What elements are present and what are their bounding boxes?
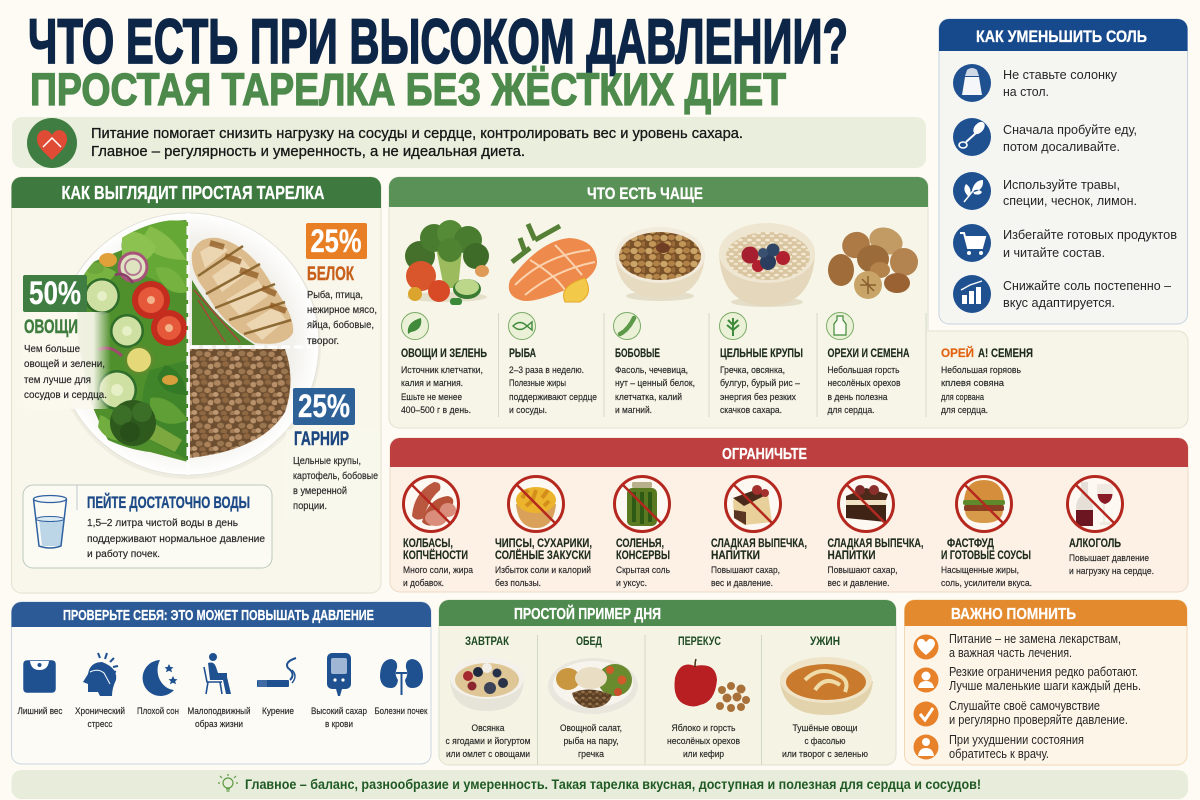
- callout: vegetables 50%: 50%: [29, 275, 81, 311]
- panel: example day: [439, 600, 896, 765]
- meal: snack: [667, 634, 750, 760]
- limit item: burger: И ГОТОВЫЕ СОУСЫ: [941, 550, 1031, 562]
- food column: legumes: БОБОВЫЕ: [615, 348, 660, 360]
- plate illustration: [55, 213, 321, 479]
- tip: chart: [953, 275, 1172, 313]
- limit item: pickles: и уксус.: [616, 578, 647, 589]
- meal: breakfast: ЗАВТРАК: [465, 634, 510, 648]
- limit item: pastry: вес и давление.: [711, 578, 773, 589]
- limit item: pastry: [711, 476, 807, 589]
- limit item: alcohol: Повышает давление: [1069, 553, 1149, 564]
- panel: limit: [390, 438, 1188, 592]
- food column: whole grains: [720, 312, 803, 416]
- meal: dinner: УЖИН: [810, 634, 840, 648]
- food column: garbled nuts duplicate: Небольшая горяовь: [941, 365, 1021, 376]
- callout: vegetables 50%: ОВОЩИ: [24, 317, 78, 338]
- limit item: alcohol: АЛКОГОЛЬ: [1069, 538, 1121, 550]
- tip: shopping cart: [953, 224, 1177, 262]
- panel: eat more often: ЧТО ЕСТЬ ЧАЩЕ: [587, 184, 703, 203]
- food column: nuts and seeds: для сердца.: [828, 405, 874, 416]
- footer banner: Главное – баланс, разнообразие и умеренность. Такая тарелка вкусная, доступная и полезная для сердца и сосудов!: [245, 776, 981, 792]
- limit item: sausages: КОЛБАСЫ,: [403, 538, 453, 550]
- icon: pod: [614, 312, 640, 340]
- limit item: chips: без пользы.: [495, 578, 541, 589]
- food: vegetables: [405, 220, 489, 305]
- meal: dinner: или творог с зеленью: [782, 749, 868, 760]
- food column: fish: 2–3 раза в неделю.: [509, 365, 584, 376]
- limit item: pastry: СЛАДКАЯ ВЫПЕЧКА,: [711, 538, 807, 550]
- limit item: burger: [941, 476, 1032, 589]
- food column: garbled nuts duplicate: А! СЕМЕНЯ: [978, 348, 1033, 360]
- icon: fish: [508, 312, 536, 340]
- limit item: burger: Насыщенные жиры,: [941, 565, 1019, 576]
- limit item: burger: соль, усилители вкуса.: [941, 578, 1032, 589]
- note: doctor: При ухудшении состояния: [949, 733, 1084, 747]
- limit item: chips: [495, 476, 592, 589]
- meal: snack: несолёных орехов: [667, 736, 740, 747]
- limit item: chips: Избыток соли и калорий: [495, 565, 591, 576]
- food: oatmeal bowl: [719, 223, 815, 307]
- note: self-check: [914, 699, 1128, 727]
- callout: vegetables 50%: тем лучше для: [24, 375, 91, 386]
- note: small steps: Резкие ограничения редко работают.: [949, 665, 1138, 679]
- callout: water: поддерживают нормальное давление: [87, 534, 265, 545]
- meal: dinner: [780, 634, 873, 760]
- icon: wheat: [720, 312, 746, 340]
- callout: side dish 25%: Цельные крупы,: [293, 456, 361, 467]
- risk: smoking: [257, 658, 296, 717]
- food column: legumes: нут – ценный белок,: [615, 378, 695, 389]
- tip: salt shaker: Не ставьте солонку: [1003, 67, 1117, 82]
- food column: legumes: Фасоль, чечевица,: [615, 365, 688, 376]
- tip: spoon: Сначала пробуйте еду,: [1003, 122, 1137, 137]
- chicken: [192, 238, 293, 344]
- risk: kidney disease: [374, 659, 428, 717]
- meal: lunch: Овощной салат,: [560, 723, 622, 734]
- callout: protein 25%: творог.: [307, 336, 339, 347]
- meal: lunch: рыба на пару,: [564, 736, 618, 747]
- limit item: sausages: [403, 476, 474, 589]
- meal: snack: Яблоко и горсть: [672, 723, 736, 734]
- meal: breakfast: [446, 634, 530, 760]
- meal: breakfast: с ягодами и йогуртом: [446, 736, 530, 747]
- tip: chart: Снижайте соль постепенно –: [1003, 278, 1172, 293]
- food column: fish: Полезные жиры: [509, 378, 566, 389]
- callout: protein 25%: [306, 223, 377, 347]
- meal: dinner: Тушёные овощи: [792, 723, 858, 734]
- risk: poor sleep: Плохой сон: [137, 706, 179, 717]
- panel: eat more often: [389, 177, 1188, 428]
- callout: water: 1,5–2 литра чистой воды в день: [87, 518, 238, 529]
- food column: whole grains: булгур, бурый рис –: [720, 378, 801, 389]
- food: walnuts: [828, 223, 918, 299]
- callout: protein 25%: яйца, бобовые,: [307, 319, 374, 331]
- risk: sedentary lifestyle: [188, 653, 250, 730]
- food column: vegetables: Ешьте не менее: [401, 392, 462, 403]
- tip: herbs: [953, 172, 1137, 210]
- meal: breakfast: Овсянка: [472, 723, 505, 734]
- food column: fish: [508, 312, 597, 416]
- meal: breakfast: или омлет с овощами: [446, 749, 530, 760]
- risk: chronic stress: [75, 653, 125, 730]
- panel: example day: ПРОСТОЙ ПРИМЕР ДНЯ: [514, 605, 661, 623]
- risk: chronic stress: Хронический: [75, 706, 125, 717]
- intro banner: Питание помогает снизить нагрузку на сосуды и сердце, контролировать вес и уровень сахара.: [91, 125, 743, 142]
- panel: limit: ОГРАНИЧЬТЕ: [722, 446, 807, 463]
- risk: high blood sugar: Высокий сахар: [311, 706, 367, 717]
- meal: lunch: [548, 634, 638, 760]
- tip: herbs: Используйте травы,: [1003, 177, 1120, 192]
- meal: dinner: с фасолью: [804, 736, 846, 747]
- panel: remember: ВАЖНО ПОМНИТЬ: [951, 606, 1076, 623]
- limit item: alcohol: [1068, 476, 1154, 577]
- food column: legumes: [614, 312, 695, 416]
- meal: lunch: гречка: [578, 749, 605, 760]
- panel: check yourself: [12, 602, 431, 764]
- broccoli on plate: [150, 424, 182, 452]
- limit item: pastry: Повышают сахар,: [711, 565, 780, 576]
- food column: legumes: и магний.: [615, 405, 652, 416]
- callout: protein 25%: Рыба, птица,: [307, 289, 363, 301]
- intro banner: Главное – регулярность и умеренность, а не идеальная диета.: [91, 143, 525, 160]
- food column: nuts and seeds: в день полезна: [828, 392, 888, 403]
- food column: vegetables: 400–500 г в день.: [401, 405, 471, 416]
- icon: light bulb: [218, 774, 238, 791]
- limit item: chips: ЧИПСЫ, СУХАРИКИ,: [495, 538, 592, 550]
- tip: shopping cart: Избегайте готовых продуктов: [1003, 227, 1177, 242]
- food column: fish: и сосуды.: [509, 405, 547, 416]
- footer banner: [12, 770, 1188, 799]
- note: doctor: обратитесь к врачу.: [949, 747, 1049, 761]
- food column: nuts and seeds: Небольшая горсть: [828, 365, 900, 376]
- food column: whole grains: скачков сахара.: [720, 405, 782, 416]
- note: small steps: Лучше маленькие шаги каждый день.: [949, 679, 1141, 693]
- callout: side dish 25%: картофель, бобовые: [293, 470, 378, 482]
- note: medication: а важная часть лечения.: [949, 646, 1072, 660]
- lentils: [190, 349, 290, 458]
- food column: vegetables: Источник клетчатки,: [401, 365, 483, 376]
- food column: whole grains: энергия без резких: [720, 392, 796, 403]
- meal: snack: или кефир: [683, 749, 724, 760]
- tip: spoon: [953, 118, 1137, 156]
- limit item: pickles: СОЛЕНЬЯ,: [616, 538, 664, 550]
- meal: snack: ПЕРЕКУС: [678, 634, 721, 648]
- note: medication: Питание – не замена лекарствам,: [949, 632, 1121, 646]
- food column: whole grains: Гречка, овсянка,: [720, 365, 785, 376]
- tip: spoon: потом досаливайте.: [1003, 139, 1120, 154]
- icon: bottle: [826, 312, 854, 340]
- callout: water: [23, 485, 272, 568]
- risk: chronic stress: стресс: [88, 719, 113, 730]
- food column: nuts and seeds: несолёных орехов: [828, 378, 900, 389]
- icon: heart: [27, 118, 77, 168]
- note: self-check: Слушайте своё самочувствие: [949, 699, 1100, 713]
- limit item: sausages: Много соли, жира: [403, 565, 474, 576]
- risk: high blood sugar: в крови: [325, 719, 353, 730]
- limit item: cake: НАПИТКИ: [828, 550, 876, 562]
- food column: garbled nuts duplicate: кплевя совяна: [941, 378, 1005, 389]
- tip: chart: вкус адаптируется.: [1003, 295, 1115, 310]
- callout: vegetables 50%: сосудов и сердца.: [24, 390, 107, 401]
- callout: water: ПЕЙТЕ ДОСТАТОЧНО ВОДЫ: [87, 493, 250, 512]
- tip: shopping cart: и читайте состав.: [1003, 245, 1105, 260]
- limit item: alcohol: и нагрузку на сердце.: [1069, 566, 1154, 577]
- panel: simple plate: [12, 177, 381, 593]
- risk: sedentary lifestyle: образ жизни: [195, 719, 243, 730]
- limit item: chips: СОЛЁНЫЕ ЗАКУСКИ: [495, 549, 591, 562]
- panel: check yourself: ПРОВЕРЬТЕ СЕБЯ: ЭТО МОЖЕТ ПОВЫШАТЬ ДАВЛЕНИЕ: [63, 608, 374, 624]
- risk: smoking: Курение: [262, 706, 294, 717]
- subtitle: ПРОСТАЯ ТАРЕЛКА БЕЗ ЖЁСТКИХ ДИЕТ: [30, 64, 786, 115]
- tip: salt shaker: на стол.: [1003, 84, 1049, 99]
- callout: vegetables 50%: овощей и зелени,: [24, 359, 105, 370]
- risk: excess weight: Лишний вес: [18, 706, 63, 717]
- limit item: pickles: Скрытая соль: [616, 565, 670, 576]
- callout: vegetables 50%: Чем больше: [24, 343, 80, 355]
- food column: nuts and seeds: ОРЕХИ И СЕМЕНА: [828, 348, 910, 360]
- risk: excess weight: [18, 660, 63, 717]
- callout: protein 25%: нежирное мясо,: [307, 305, 377, 316]
- callout: side dish 25%: ГАРНИР: [294, 429, 349, 450]
- food column: nuts and seeds: [826, 312, 910, 416]
- intro banner: [12, 117, 926, 168]
- food column: fish: поддерживают сердце: [509, 392, 597, 403]
- panel: remember: [904, 600, 1187, 765]
- food column: legumes: клетчатка, калий: [615, 392, 682, 403]
- risk: sedentary lifestyle: Малоподвижный: [188, 706, 250, 717]
- callout: side dish 25%: в умеренной: [293, 486, 347, 497]
- callout: side dish 25%: порции.: [293, 501, 327, 512]
- note: medication: [914, 632, 1121, 660]
- tip: salt shaker: [953, 64, 1117, 102]
- food column: garbled nuts duplicate: ОРЕЙ: [941, 347, 974, 360]
- food column: garbled nuts duplicate: для сорвана: [941, 392, 985, 403]
- food column: garbled nuts duplicate: для сердца.: [941, 405, 988, 416]
- limit item: cake: СЛАДКАЯ ВЫПЕЧКА,: [828, 538, 924, 550]
- food column: vegetables: [401, 312, 487, 416]
- limit item: pastry: НАПИТКИ: [711, 550, 760, 562]
- callout: water: и работу почек.: [87, 548, 160, 560]
- tip: herbs: специи, чеснок, лимон.: [1003, 193, 1137, 208]
- limit item: cake: вес и давление.: [828, 578, 890, 589]
- note: small steps: [914, 665, 1141, 693]
- food: salmon: [509, 224, 597, 302]
- limit item: sausages: и добавок.: [403, 578, 444, 589]
- food: beans bowl: [615, 227, 705, 301]
- limit item: burger: ФАСТФУД: [947, 538, 994, 550]
- herbs under chicken: [192, 280, 255, 345]
- callout: side dish 25%: [286, 388, 380, 520]
- food column: whole grains: ЦЕЛЬНЫЕ КРУПЫ: [720, 348, 803, 360]
- panel: simple plate: КАК ВЫГЛЯДИТ ПРОСТАЯ ТАРЕЛКА: [62, 183, 324, 203]
- food column: fish: РЫБА: [509, 348, 536, 360]
- risk: high blood sugar: [311, 653, 367, 730]
- note: doctor: [914, 733, 1084, 761]
- column dividers: [498, 313, 926, 417]
- salad half: [76, 220, 188, 462]
- panel: reduce salt: [939, 19, 1188, 324]
- food column: garbled nuts duplicate: [941, 347, 1033, 416]
- meal: lunch: ОБЕД: [576, 634, 602, 648]
- callout: side dish 25%: 25%: [298, 388, 350, 424]
- limit item: cake: [828, 476, 924, 589]
- callout: protein 25%: 25%: [310, 223, 362, 259]
- icon: glass of water: [34, 496, 66, 548]
- risk: poor sleep: [137, 660, 179, 717]
- limit item: pickles: КОНСЕРВЫ: [616, 550, 670, 562]
- callout: protein 25%: БЕЛОК: [307, 264, 354, 285]
- food column: vegetables: ОВОЩИ И ЗЕЛЕНЬ: [401, 348, 487, 360]
- limit item: sausages: КОПЧЁНОСТИ: [403, 549, 468, 562]
- food column: vegetables: калия и магния.: [401, 378, 463, 389]
- limit item: pickles: [614, 476, 670, 589]
- icon: leaf: [402, 312, 428, 340]
- note: self-check: и регулярно проверяйте давление.: [949, 713, 1128, 727]
- callout: vegetables 50%: [23, 275, 111, 409]
- panel: reduce salt: КАК УМЕНЬШИТЬ СОЛЬ: [976, 27, 1147, 46]
- limit item: cake: Повышают сахар,: [828, 565, 898, 576]
- risk: kidney disease: Болезни почек: [374, 706, 428, 717]
